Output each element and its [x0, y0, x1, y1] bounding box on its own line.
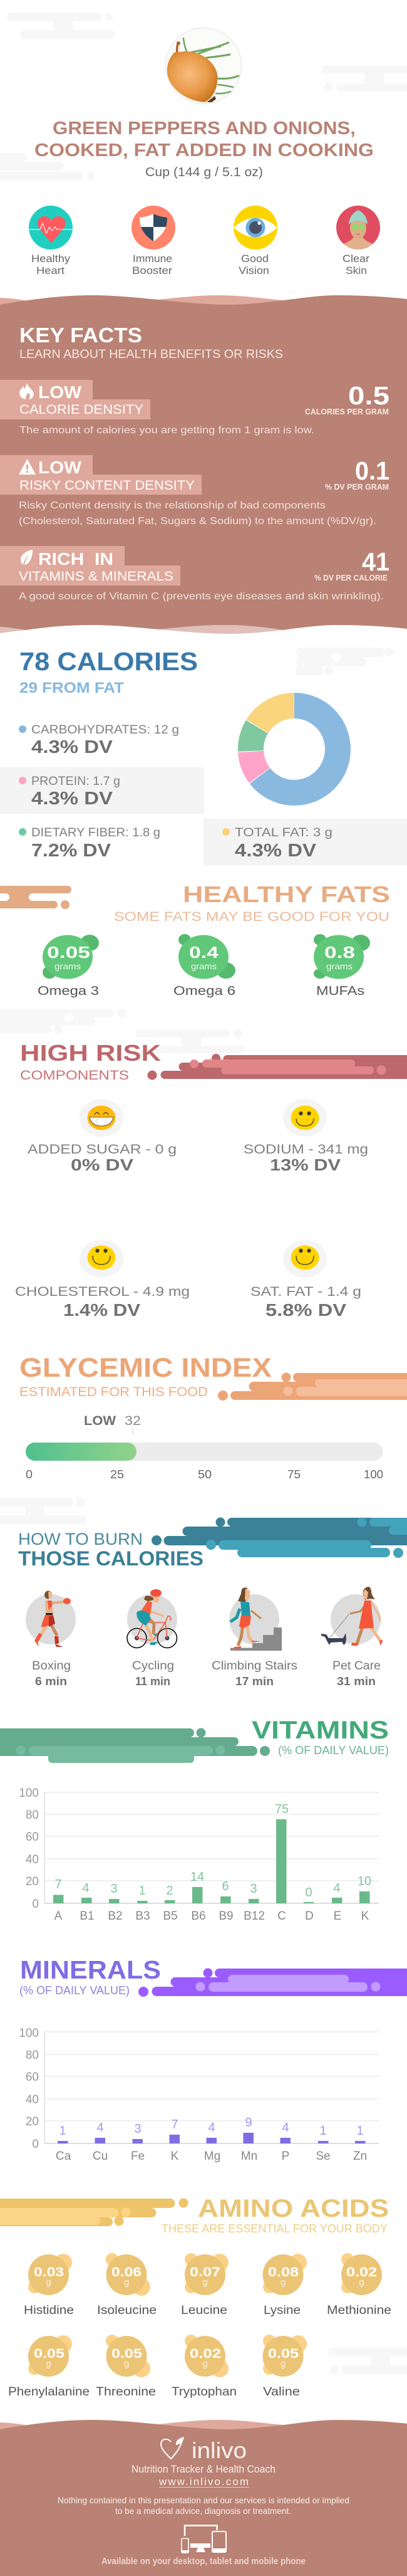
risk item: added sugar: ADDED SUGAR - 0 g — [28, 1142, 177, 1157]
panel: how to burn those calories — [18, 1517, 407, 1688]
burn heading: THOSE CALORIES — [18, 1547, 204, 1570]
fat badge: omega 6: 0.4 — [189, 943, 219, 962]
bar chart: minerals: 4 — [96, 2121, 104, 2135]
vitamins heading: VITAMINS — [252, 1716, 389, 1744]
nutrient: dietary fiber: 7.2% DV — [31, 841, 111, 861]
nutrient: carbohydrates: CARBOHYDRATES: 12 g — [31, 723, 179, 737]
bar chart: vitamins: 2 — [166, 1884, 173, 1898]
amino badge: valine: 0.05 — [268, 2347, 299, 2361]
bar chart: vitamins: 75 — [275, 1802, 289, 1816]
nutrient: total fat — [204, 819, 407, 865]
glycemic axis labels: 0 — [26, 1468, 33, 1481]
bar chart: minerals: 1 — [59, 2124, 66, 2138]
amino badge: leucine — [181, 2253, 229, 2317]
nutrient: dietary fiber — [19, 826, 160, 861]
bar chart: minerals: 4 — [208, 2121, 215, 2135]
glycemic axis labels: 100 — [364, 1468, 383, 1481]
amino badge: leucine: Leucine — [181, 2304, 227, 2317]
risk item: saturated fat: 5.8% DV — [265, 1300, 346, 1320]
risk item: added sugar — [28, 1099, 177, 1174]
bar chart: vitamins: 40 — [26, 1853, 39, 1866]
fact: low calorie density: 0.5 — [348, 381, 389, 410]
panel: amino acids — [0, 2195, 391, 2399]
risk item: cholesterol: 1.4% DV — [63, 1300, 140, 1320]
fat badge: mufas — [314, 934, 370, 998]
risk item: sodium — [244, 1099, 368, 1174]
amino badge: lysine: g — [281, 2277, 286, 2288]
footer tagline and link: Nutrition Tracker & Health Coach — [131, 2463, 276, 2475]
fat badge: omega 3: Omega 3 — [38, 984, 99, 998]
risk item: cholesterol: CHOLESTEROL - 4.9 mg — [15, 1285, 190, 1299]
bar chart: minerals: Fe — [131, 2150, 145, 2163]
calories heading: 29 FROM FAT — [19, 680, 124, 697]
fat badge: omega 3: 0.05 — [47, 943, 90, 962]
key facts heading — [19, 323, 283, 361]
high risk heading — [20, 1040, 161, 1083]
activity: pet care — [321, 1587, 383, 1688]
fact: low calorie density: CALORIES PER GRAM — [305, 407, 389, 416]
fact: rich in vitamins and minerals — [0, 546, 389, 602]
benefit: good vision — [234, 206, 277, 276]
donut chart — [250, 706, 338, 792]
serving size: Cup (144 g / 5.1 oz) — [145, 166, 263, 179]
icon: desktop, tablet and phone — [182, 2525, 226, 2553]
panel: key facts — [0, 295, 407, 634]
activity: climbing stairs: 17 min — [235, 1675, 274, 1688]
activity: cycling: 11 min — [135, 1675, 170, 1688]
amino badge: phenylalanine: g — [46, 2358, 51, 2369]
risk item: added sugar: 0% DV — [71, 1155, 134, 1174]
high risk heading: COMPONENTS — [20, 1068, 129, 1083]
food photo: onion with green leaves — [165, 28, 242, 104]
panel: footer — [0, 2420, 407, 2576]
footer availability note: Available on your desktop, tablet and mobile phone — [101, 2556, 306, 2567]
healthy fats heading — [114, 881, 390, 924]
healthy fats heading: HEALTHY FATS — [183, 881, 390, 907]
benefit: immune booster: Booster — [132, 265, 172, 276]
title: COOKED, FAT ADDED IN COOKING — [34, 140, 374, 160]
activity: pet care: 31 min — [337, 1675, 376, 1688]
bar chart: vitamins: 80 — [26, 1809, 39, 1822]
benefit: immune booster: Immune — [133, 253, 172, 265]
bar chart: vitamins: D — [305, 1910, 314, 1923]
bar chart: minerals: 1 — [319, 2124, 327, 2138]
bar chart: minerals: Cu — [93, 2150, 108, 2163]
risk item: sodium: 13% DV — [270, 1155, 341, 1174]
fat badge: omega 3 — [38, 935, 99, 998]
bar chart: vitamins: B5 — [163, 1910, 178, 1923]
fat badge: omega 6 — [173, 934, 235, 998]
fat badge: mufas: grams — [326, 961, 353, 971]
glycemic value label: LOW — [84, 1414, 116, 1428]
bar chart: vitamins: 10 — [358, 1874, 371, 1888]
fat badge: omega 6: grams — [191, 961, 217, 971]
fact: low risky content density: 0.1 — [355, 456, 389, 485]
benefit: healthy heart: Healthy — [31, 253, 71, 265]
fact: low risky content density: LOW — [38, 458, 82, 477]
benefit: healthy heart — [29, 206, 73, 276]
decorative banner: vitamins — [0, 1728, 270, 1763]
vitamins heading: (% OF DAILY VALUE) — [278, 1744, 389, 1757]
amino badge: isoleucine: 0.06 — [111, 2265, 142, 2279]
nutrient: protein — [0, 767, 204, 814]
amino acids heading: AMINO ACIDS — [198, 2195, 389, 2222]
title — [34, 118, 374, 160]
fact: rich in vitamins and minerals: 41 — [362, 547, 389, 576]
bar chart: minerals: 7 — [171, 2118, 178, 2132]
bar chart: vitamins: 7 — [54, 1878, 62, 1891]
fact: rich in vitamins and minerals: % DV PER CALORIE — [314, 574, 388, 582]
bar chart: vitamins: 0 — [305, 1886, 312, 1900]
bar chart: minerals: 60 — [26, 2071, 39, 2084]
amino badge: phenylalanine — [8, 2335, 90, 2399]
nutrient: carbohydrates — [19, 723, 179, 757]
footer disclaimer: to be a medical advice, diagnosis or treatment. — [115, 2506, 291, 2516]
glycemic axis labels: 75 — [287, 1468, 301, 1481]
bar chart: minerals: 80 — [26, 2049, 39, 2062]
fact: low risky content density: (Cholesterol, Saturated Fat, Sugars & Sodium) to the amount (%DV/gr). — [19, 516, 376, 527]
fact: low risky content density: % DV PER GRAM — [325, 483, 389, 492]
benefit: healthy heart: Heart — [36, 265, 64, 276]
fact: low risky content density: Risky Content density is the relationship of bad components — [19, 500, 326, 511]
amino badge: isoleucine — [97, 2253, 157, 2317]
bar chart: minerals — [19, 2027, 379, 2163]
calories heading: 78 CALORIES — [19, 647, 198, 676]
fact: low calorie density: The amount of calories you are getting from 1 gram is low. — [19, 425, 314, 436]
benefit: clear skin — [336, 206, 380, 276]
amino badge: histidine: 0.03 — [34, 2265, 64, 2279]
glycemic index heading — [19, 1353, 272, 1399]
bar chart: minerals: Mn — [241, 2150, 257, 2163]
amino badge: leucine: 0.07 — [190, 2265, 220, 2279]
benefit: immune booster — [131, 206, 175, 276]
vitamins heading — [252, 1716, 389, 1757]
risk item: sodium: SODIUM - 341 mg — [244, 1142, 368, 1157]
bar chart: vitamins: C — [277, 1910, 286, 1923]
amino badge: leucine: g — [202, 2277, 208, 2288]
amino badge: phenylalanine: Phenylalanine — [8, 2385, 90, 2399]
amino badge: phenylalanine: 0.05 — [34, 2347, 64, 2361]
activity: boxing: Boxing — [32, 1659, 71, 1673]
bar chart: minerals: 20 — [26, 2115, 39, 2128]
amino badge: threonine: g — [124, 2358, 129, 2369]
amino badge: lysine — [263, 2254, 307, 2317]
amino badge: valine: Valine — [263, 2385, 300, 2399]
bar chart: minerals: 0 — [32, 2138, 39, 2151]
panel: high risk components — [15, 1040, 407, 1320]
bar chart: minerals: 1 — [356, 2124, 364, 2138]
minerals heading: MINERALS — [20, 1955, 161, 1984]
amino badge: tryptophan: Tryptophan — [172, 2385, 237, 2399]
glycemic axis labels — [26, 1468, 383, 1481]
bar chart: vitamins: 60 — [26, 1831, 39, 1844]
panel: glycemic index — [19, 1353, 407, 1481]
bar chart: minerals: K — [171, 2150, 179, 2163]
bar chart: minerals: 100 — [19, 2027, 39, 2040]
fat badge: mufas: MUFAs — [316, 984, 364, 998]
glycemic axis labels: 25 — [110, 1468, 124, 1481]
minerals heading — [19, 1955, 161, 1997]
bar chart: vitamins: A — [54, 1910, 63, 1923]
nutrient: total fat: 4.3% DV — [235, 841, 317, 861]
bar chart: vitamins: 6 — [222, 1879, 229, 1893]
bar chart: vitamins: B1 — [80, 1910, 95, 1923]
bar chart: minerals: 3 — [134, 2122, 142, 2136]
bar chart: vitamins: K — [361, 1910, 369, 1923]
footer tagline and link: www.inlivo.com — [158, 2476, 249, 2488]
fact: low calorie density: LOW — [38, 382, 82, 402]
amino badge: methionine: 0.02 — [346, 2265, 377, 2279]
decorative banner: high risk — [148, 1054, 407, 1080]
benefit: good vision: Vision — [239, 265, 269, 276]
benefit: clear skin: Clear — [343, 253, 369, 265]
panel: calories — [0, 647, 407, 865]
fat badge: omega 3: grams — [54, 961, 81, 971]
decorative banner: amino acids — [0, 2198, 188, 2226]
benefit: good vision: Good — [241, 253, 269, 265]
fact: rich in vitamins and minerals: RICH IN — [38, 549, 113, 569]
amino badge: tryptophan — [172, 2335, 237, 2399]
bar chart: vitamins: 4 — [333, 1881, 341, 1895]
nutrient: carbohydrates: 4.3% DV — [31, 737, 113, 757]
bar chart: minerals: 40 — [26, 2093, 39, 2106]
amino badge: methionine: Methionine — [327, 2304, 391, 2317]
benefit: clear skin: Skin — [346, 265, 367, 276]
risk item: cholesterol — [15, 1240, 190, 1320]
bar chart: vitamins: 4 — [82, 1881, 90, 1895]
high risk heading: HIGH RISK — [20, 1040, 161, 1066]
fact: low calorie density: CALORIE DENSITY — [19, 402, 143, 417]
activity: cycling — [127, 1589, 177, 1688]
activity: boxing — [26, 1591, 76, 1688]
decorative banner: burn — [152, 1517, 407, 1558]
glycemic index heading: ESTIMATED FOR THIS FOOD — [19, 1385, 208, 1399]
bar chart: vitamins: B9 — [219, 1910, 234, 1923]
bar chart: minerals: Ca — [56, 2150, 71, 2163]
bar chart: vitamins: 3 — [110, 1882, 118, 1896]
title: GREEN PEPPERS AND ONIONS, — [53, 118, 356, 139]
risk item: saturated fat: SAT. FAT - 1.4 g — [250, 1285, 361, 1299]
glycemic value label: 32 — [125, 1414, 141, 1428]
bar chart: vitamins — [19, 1787, 379, 1923]
bar chart: minerals: Se — [316, 2150, 331, 2163]
glycemic axis labels: 50 — [198, 1468, 212, 1481]
risk item: saturated fat — [250, 1240, 361, 1320]
activity: climbing stairs — [212, 1587, 297, 1688]
amino badge: methionine — [327, 2253, 391, 2317]
bar chart: minerals: Mg — [204, 2150, 220, 2163]
amino badge: threonine: 0.05 — [111, 2347, 142, 2361]
nutrient: protein: 4.3% DV — [31, 789, 113, 809]
amino badge: lysine: Lysine — [264, 2304, 301, 2317]
bar chart: vitamins: 1 — [138, 1884, 146, 1898]
amino badge: tryptophan: 0.02 — [190, 2347, 221, 2361]
glycemic progress bar — [26, 1443, 383, 1461]
activity: boxing: 6 min — [35, 1675, 67, 1688]
bar chart: vitamins: 0 — [32, 1898, 39, 1911]
fact: rich in vitamins and minerals: A good source of Vitamin C (prevents eye diseases and skin wrinkling). — [19, 591, 384, 602]
amino acids heading — [162, 2195, 389, 2235]
amino badge: isoleucine: g — [124, 2277, 129, 2288]
minerals heading: (% OF DAILY VALUE) — [19, 1984, 130, 1997]
footer disclaimer — [58, 2495, 349, 2516]
amino badge: tryptophan: g — [202, 2358, 208, 2369]
bar chart: minerals: P — [282, 2150, 289, 2163]
decorative banner: healthy fats — [0, 886, 71, 909]
panel: vitamins — [0, 1716, 389, 1923]
key facts heading: KEY FACTS — [19, 323, 142, 347]
amino badge: threonine: Threonine — [96, 2385, 156, 2399]
bar chart: minerals: 9 — [245, 2116, 252, 2130]
fact: low calorie density — [0, 380, 389, 436]
burn heading — [18, 1530, 204, 1570]
footer tagline and link — [131, 2463, 276, 2488]
amino badge: histidine: g — [46, 2277, 51, 2288]
logo: inlivo: inlivo — [192, 2437, 247, 2463]
bar chart: vitamins: B6 — [191, 1910, 206, 1923]
amino badge: histidine: Histidine — [24, 2304, 74, 2317]
glycemic value label — [84, 1414, 141, 1435]
nutrient: protein: PROTEIN: 1.7 g — [31, 775, 120, 788]
amino badge: isoleucine: Isoleucine — [97, 2304, 157, 2317]
bar chart: vitamins: E — [334, 1910, 341, 1923]
bar chart: vitamins: B12 — [244, 1910, 265, 1923]
activity: climbing stairs: Climbing Stairs — [212, 1659, 297, 1673]
bar chart: minerals: 4 — [282, 2121, 289, 2135]
panel: minerals — [19, 1955, 407, 2163]
fact: rich in vitamins and minerals: VITAMINS & MINERALS — [19, 569, 173, 584]
amino badge: methionine: g — [359, 2277, 364, 2288]
burn heading: HOW TO BURN — [18, 1530, 143, 1548]
calories heading — [19, 647, 198, 697]
panel: healthy fats — [0, 881, 390, 998]
glycemic index heading: GLYCEMIC INDEX — [19, 1353, 272, 1383]
fat badge: omega 6: Omega 6 — [173, 984, 235, 998]
bar chart: vitamins: 100 — [19, 1787, 39, 1800]
amino badge: lysine: 0.08 — [268, 2265, 299, 2279]
decorative banner: minerals — [138, 1969, 407, 1997]
decorative banner: glycemic index — [218, 1373, 407, 1401]
fact: low risky content density — [0, 455, 389, 527]
nutrient: total fat: TOTAL FAT: 3 g — [235, 826, 332, 839]
fat badge: mufas: 0.8 — [324, 943, 355, 962]
logo: inlivo — [161, 2437, 247, 2463]
bar chart: vitamins: B3 — [135, 1910, 150, 1923]
amino badge: valine — [263, 2335, 307, 2399]
bar chart: minerals: Zn — [353, 2150, 367, 2163]
bar chart: vitamins: 3 — [250, 1882, 257, 1896]
amino acids heading: THESE ARE ESSENTIAL FOR YOUR BODY — [162, 2222, 388, 2235]
bar chart: vitamins: B2 — [108, 1910, 123, 1923]
nutrient: dietary fiber: DIETARY FIBER: 1.8 g — [31, 826, 160, 839]
bar chart: vitamins: 14 — [190, 1870, 204, 1884]
activity: cycling: Cycling — [132, 1659, 174, 1673]
amino badge: histidine — [24, 2254, 74, 2317]
amino badge: threonine — [96, 2335, 156, 2399]
healthy fats heading: SOME FATS MAY BE GOOD FOR YOU — [114, 910, 389, 924]
amino badge: valine: g — [281, 2358, 286, 2369]
activity: pet care: Pet Care — [332, 1659, 381, 1673]
fact: low risky content density: RISKY CONTENT DENSITY — [19, 478, 195, 493]
key facts heading: LEARN ABOUT HEALTH BENEFITS OR RISKS — [19, 347, 283, 361]
footer disclaimer: Nothing contained in this presentation and our services is intended or implied — [58, 2495, 349, 2505]
bar chart: vitamins: 20 — [26, 1875, 39, 1888]
